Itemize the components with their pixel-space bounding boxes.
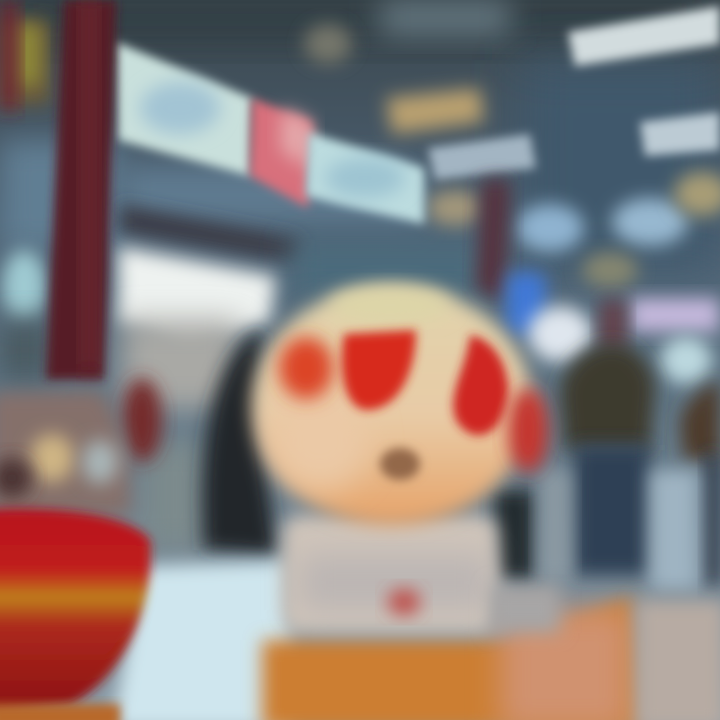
red striped bowl foreground xyxy=(0,390,150,720)
mushroom figure xyxy=(252,285,560,633)
billboard xyxy=(116,42,424,224)
ceiling lights xyxy=(0,0,720,288)
figure body xyxy=(282,515,560,633)
figure head xyxy=(252,285,532,525)
warm hanging light xyxy=(386,88,484,226)
maroon pillars xyxy=(0,0,510,462)
dark arch behind figure xyxy=(202,330,534,580)
blue and purple signs right xyxy=(506,272,720,384)
bright window area xyxy=(0,246,276,550)
bowl lid xyxy=(0,390,131,516)
figure face mark xyxy=(380,448,420,480)
people in background xyxy=(540,300,720,590)
table surfaces xyxy=(112,560,720,720)
bowl base xyxy=(0,704,120,720)
red spots xyxy=(279,330,548,472)
bowl body xyxy=(0,509,150,715)
